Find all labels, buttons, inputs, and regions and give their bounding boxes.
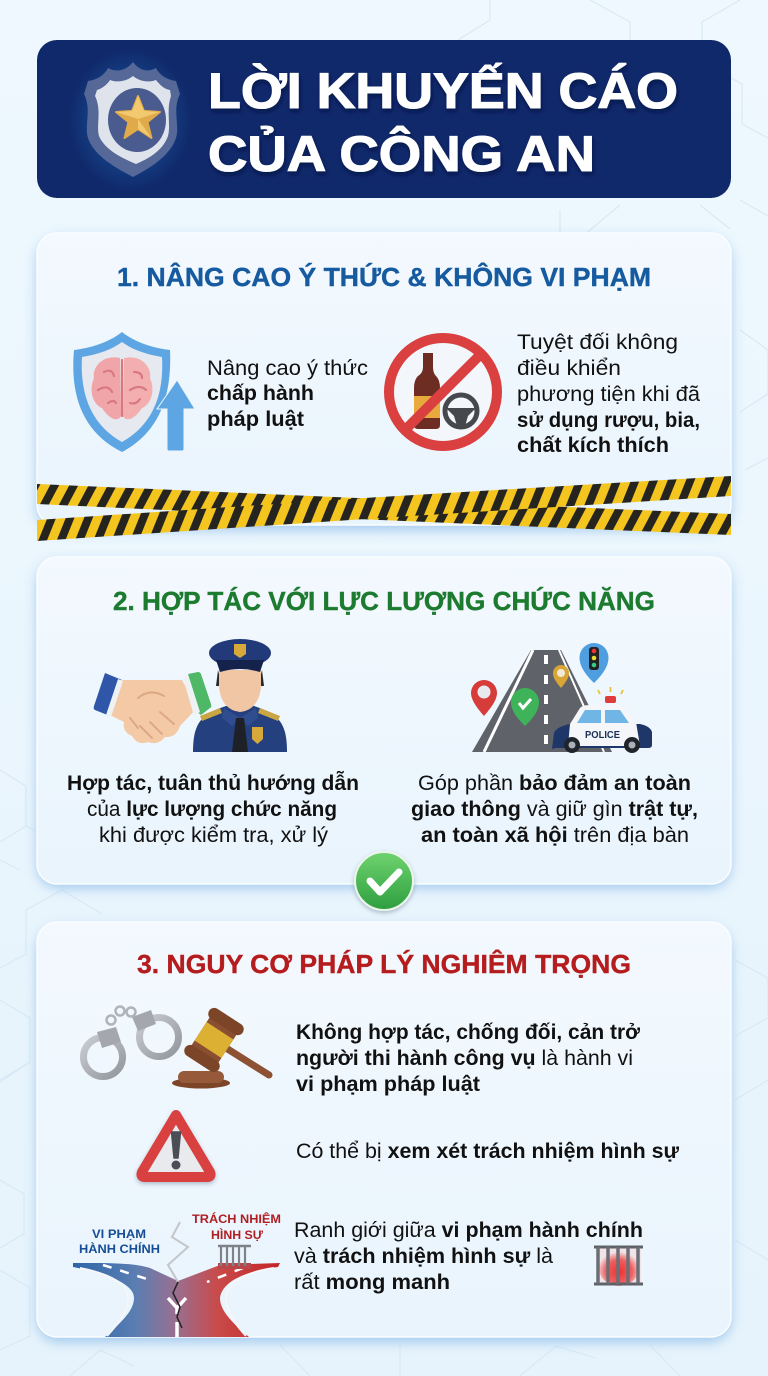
pin: yellow <box>553 665 569 688</box>
text: fragile boundary: và trách nhiệm hình sự là <box>294 1245 553 1268</box>
icon: police car <box>552 687 652 753</box>
text: fragile boundary <box>294 1219 643 1294</box>
text: no driving under influence: sử dụng rượu, bia, <box>517 409 700 432</box>
heading 3: 3. NGUY CƠ PHÁP LÝ NGHIÊM TRỌNG <box>137 949 631 979</box>
text: no driving under influence: Tuyệt đối không <box>517 331 678 354</box>
icon: brain shield with arrow <box>73 332 195 452</box>
panel 3: legal risk <box>37 922 731 1342</box>
text: no driving under influence: phương tiện khi đã <box>517 383 700 406</box>
text: raise awareness <box>207 357 368 431</box>
label: criminal liability <box>192 1211 281 1242</box>
icon: gavel <box>172 1006 269 1088</box>
panel 2: cooperation <box>37 557 731 888</box>
icon: road and police car <box>471 643 652 753</box>
text: no driving under influence <box>517 331 700 457</box>
title <box>208 63 678 182</box>
panel 1: awareness <box>37 233 731 530</box>
icon: small jail on road <box>218 1246 251 1269</box>
icon: warning triangle <box>141 1115 211 1177</box>
text: fragile boundary: Ranh giới giữa vi phạm hành chính <box>294 1219 643 1242</box>
text: raise awareness: chấp hành <box>207 382 314 405</box>
text: cooperate: Hợp tác, tuân thủ hướng dẫn <box>67 771 359 795</box>
icon: forked road <box>73 1222 280 1337</box>
label: administrative violation <box>79 1227 160 1256</box>
icon: police badge <box>84 62 180 177</box>
title: CỦA CÔNG AN <box>208 125 595 182</box>
text: fragile boundary: rất mong manh <box>294 1271 450 1294</box>
icon: green check <box>355 852 413 910</box>
title: LỜI KHUYẾN CÁO <box>208 63 678 119</box>
pin: red <box>471 680 497 716</box>
text: cooperate: của lực lượng chức năng <box>87 798 337 821</box>
text: no driving under influence: chất kích thích <box>517 434 669 457</box>
icon: police car: POLICE <box>585 730 620 741</box>
icon: no alcohol while driving <box>389 338 497 446</box>
text: no driving under influence: điều khiển <box>517 357 621 380</box>
text: road safety: an toàn xã hội trên địa bàn <box>421 824 689 847</box>
text: cooperate: khi được kiểm tra, xử lý <box>99 824 329 847</box>
icon: handcuffs <box>84 1006 178 1076</box>
text: obstruction is a violation: vi phạm pháp luật <box>296 1073 480 1096</box>
heading 1: 1. NÂNG CAO Ý THỨC & KHÔNG VI PHẠM <box>117 262 651 292</box>
heading 2: 2. HỢP TÁC VỚI LỰC LƯỢNG CHỨC NĂNG <box>113 586 655 616</box>
text: criminal liability: Có thể bị xem xét trách nhiệm hình sự <box>296 1140 680 1163</box>
label: administrative violation: VI PHẠM <box>92 1227 146 1241</box>
police tape <box>37 476 731 541</box>
text: raise awareness: pháp luật <box>207 408 304 431</box>
text: cooperate <box>67 771 359 847</box>
header banner <box>37 40 731 198</box>
pin: traffic light <box>580 643 608 683</box>
icon: jail bars <box>594 1247 643 1286</box>
text: obstruction is a violation: người thi hành công vụ là hành vi <box>296 1047 633 1070</box>
text: raise awareness: Nâng cao ý thức <box>207 357 368 380</box>
label: administrative violation: HÀNH CHÍNH <box>79 1241 160 1256</box>
icon: police officer <box>193 639 287 752</box>
label: criminal liability: TRÁCH NHIỆM <box>192 1211 281 1226</box>
text: road safety: Góp phần bảo đảm an toàn <box>418 772 691 795</box>
icon: handshake <box>94 672 211 743</box>
text: obstruction is a violation <box>296 1021 640 1096</box>
text: road safety: giao thông và giữ gìn trật tự, <box>411 798 698 821</box>
text: obstruction is a violation: Không hợp tác, chống đối, cản trở <box>296 1021 640 1044</box>
text: road safety <box>411 772 698 847</box>
label: criminal liability: HÌNH SỰ <box>211 1227 263 1242</box>
pin: green check <box>511 688 539 726</box>
